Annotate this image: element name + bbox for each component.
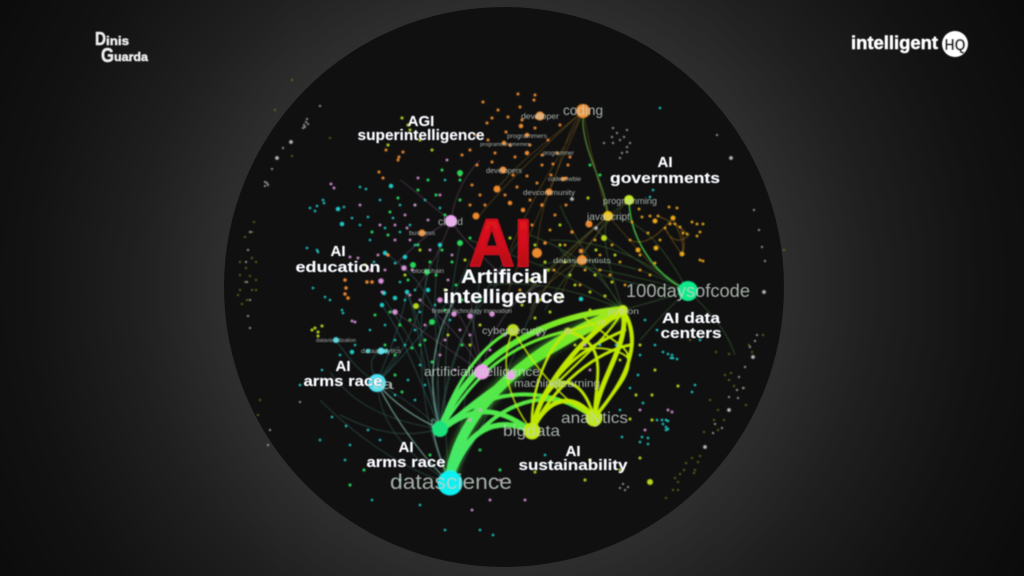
- label: developer: developer: [521, 111, 559, 121]
- label: AGI superintelligence: AGI: [408, 113, 434, 130]
- node: cybersecurity: [507, 324, 519, 336]
- label: machinelearning: machinelearning: [514, 378, 600, 390]
- dots: grey and white outer ring: [246, 106, 765, 490]
- node: 100daysofcode: [678, 281, 698, 301]
- label: pink cluster terms: fintech technology innovation: [432, 309, 512, 315]
- label: datascientists: datascientists: [553, 256, 611, 265]
- label: AI governments: [610, 154, 720, 187]
- label: AGI superintelligence: [358, 113, 484, 144]
- node: bigdata: [524, 422, 540, 440]
- label: devcommunity: devcommunity: [523, 188, 575, 197]
- label: AI governments: governments: [610, 170, 720, 187]
- label: AI education: AI: [330, 243, 346, 260]
- label: 100daysofcode: 100daysofcode: [626, 281, 750, 301]
- node: orange by logo: [532, 248, 542, 258]
- label: python: python: [608, 306, 639, 316]
- faint background edges: [320, 111, 735, 483]
- label: iot secondary: iot: [597, 318, 606, 327]
- node: javascript: [603, 211, 613, 221]
- label: artificialintelligence: artificialintelligence: [424, 365, 540, 379]
- logo: Dinis Guarda: inis: [106, 36, 129, 48]
- label: AI education: education: [296, 259, 380, 276]
- label: AGI superintelligence: superintelligence: [358, 127, 484, 144]
- thick arcs: green: [440, 309, 623, 478]
- node: cloud: [445, 215, 457, 227]
- label: AI arms race left: arms race: [304, 373, 382, 390]
- label: AI governments: AI: [658, 154, 672, 171]
- label: cloud: cloud: [438, 217, 463, 228]
- node: programming: [624, 195, 634, 205]
- logo: Dinis Guarda: uarda: [114, 52, 149, 64]
- label: datascience: datascience: [390, 471, 512, 494]
- edge: programming to 100daysofcode: [629, 200, 688, 291]
- AI logo: AI: [469, 206, 532, 281]
- heading: Artificial intelligence: Artificial: [461, 267, 548, 288]
- node: datascience: [438, 470, 462, 496]
- node: coding: [576, 104, 590, 118]
- label: bigdata: bigdata: [503, 423, 560, 440]
- node: pink secondary: [506, 370, 516, 380]
- node: data: [368, 374, 386, 392]
- logo: intelligentHQ: HQ: [944, 37, 966, 54]
- label: programmer: programmer: [543, 151, 574, 157]
- label: coding: coding: [563, 103, 603, 118]
- label: AI data centers: centers: [660, 325, 722, 342]
- label: AI data centers: [660, 310, 722, 342]
- label: javascript: javascript: [586, 212, 630, 223]
- dots: pink and lilac: [331, 160, 672, 510]
- label: dataanalytics: dataanalytics: [361, 349, 401, 355]
- label: codenewbie: codenewbie: [548, 176, 581, 183]
- label: AI data centers: AI data: [662, 310, 721, 327]
- label: data: ta: [372, 376, 394, 392]
- label: datavisualization: datavisualization: [316, 338, 356, 344]
- label: blockchain: blockchain: [412, 269, 444, 275]
- node: dataanalytics: [378, 348, 384, 354]
- network circle background: [224, 7, 784, 567]
- label: AI sustainability: sustainability: [518, 457, 628, 474]
- label: business: business: [409, 230, 436, 237]
- label: AI arms race bottom: AI: [398, 439, 414, 456]
- node: machinelearning: [552, 378, 562, 388]
- dots: cyan and teal: [300, 108, 700, 535]
- node: analytics: [586, 410, 602, 426]
- label: developers: developers: [486, 166, 522, 175]
- dots: orange cluster: [345, 94, 589, 298]
- topic labels: [296, 113, 722, 474]
- label: AI arms race bottom: arms race: [366, 454, 446, 471]
- node: datascientists: [577, 255, 587, 265]
- label: programming: programming: [603, 196, 657, 206]
- label: AI arms race bottom: [366, 439, 446, 471]
- heading: Artificial intelligence: [443, 267, 565, 308]
- logo: Dinis Guarda: D: [95, 29, 106, 49]
- dots: olive outer ring: [238, 80, 784, 498]
- label: programmingmemes: programmingmemes: [480, 142, 531, 148]
- label: cybersecurity: cybersecurity: [482, 325, 548, 337]
- label: iot: iot: [564, 327, 573, 336]
- label: AI arms race left: AI: [336, 358, 350, 375]
- logo: intelligentHQ: intelligent: [851, 33, 938, 53]
- node: iot: [564, 328, 572, 334]
- edge: ai fan to data: [377, 300, 455, 483]
- node labels: [316, 103, 750, 494]
- label: AI sustainability: AI: [566, 443, 580, 460]
- edge: coding to javascript: [583, 111, 608, 216]
- label: programmers: programmers: [507, 134, 547, 140]
- dots: green: [350, 165, 600, 485]
- dots: gold cluster: [520, 207, 703, 290]
- label: AI sustainability: [518, 443, 628, 474]
- label: analytics: analytics: [561, 410, 628, 427]
- node: developer: [536, 112, 544, 120]
- network graph: [238, 80, 784, 535]
- glow under green arc: [450, 311, 623, 480]
- label: AI arms race left: [304, 358, 382, 390]
- thick arcs: lime: [506, 310, 632, 431]
- node: python: [618, 305, 628, 315]
- node: ai: [432, 421, 448, 437]
- heading: Artificial intelligence: intelligence: [443, 287, 565, 308]
- dots: lime and yellow: [312, 118, 678, 482]
- node: dataviz: [333, 337, 339, 343]
- logo: intelligentHQ: [851, 31, 968, 57]
- logo: Dinis Guarda: G: [101, 45, 114, 67]
- node: artificialintelligence: [474, 364, 490, 380]
- label: AI education: [296, 243, 380, 276]
- logo: Dinis Guarda: [95, 29, 149, 67]
